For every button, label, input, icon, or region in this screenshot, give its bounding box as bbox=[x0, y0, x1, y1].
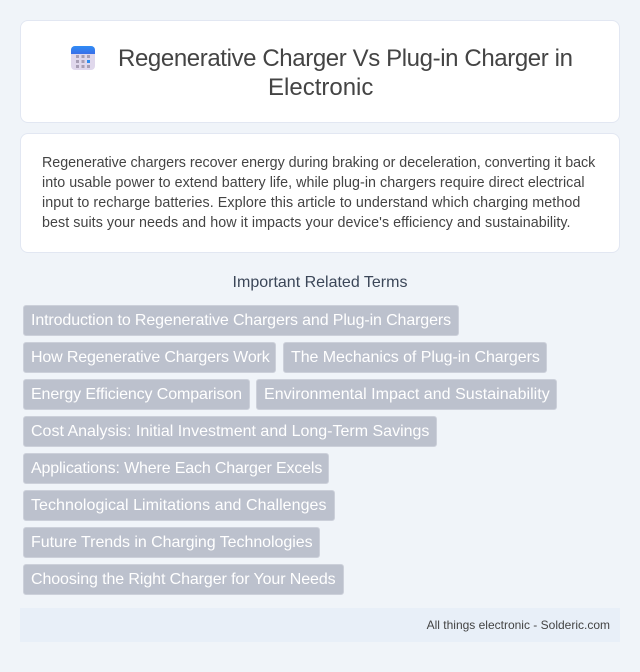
tag bbox=[23, 490, 335, 521]
tag: Energy Efficiency Comparison bbox=[31, 386, 242, 403]
tag bbox=[283, 342, 547, 373]
tag bbox=[23, 342, 276, 373]
icon: calendar bbox=[71, 46, 95, 70]
tag bbox=[23, 305, 459, 336]
tag: Technological Limitations and Challenges bbox=[31, 497, 327, 514]
tag bbox=[23, 379, 250, 410]
tag: Choosing the Right Charger for Your Needs bbox=[31, 571, 336, 588]
footer bar bbox=[20, 608, 620, 642]
tag: The Mechanics of Plug-in Chargers bbox=[291, 349, 540, 366]
tag bbox=[23, 416, 437, 447]
tag: Future Trends in Charging Technologies bbox=[31, 534, 313, 551]
title bbox=[118, 45, 573, 101]
tag bbox=[23, 564, 344, 595]
tag bbox=[23, 453, 329, 484]
title: Regenerative Charger Vs Plug-in Charger in bbox=[118, 45, 573, 72]
title: Electronic bbox=[268, 74, 373, 101]
intro paragraph: into usable power to extend battery life, while plug-in chargers require direct electrical bbox=[42, 175, 585, 191]
tag bbox=[256, 379, 557, 410]
tag: Environmental Impact and Sustainability bbox=[264, 386, 550, 403]
tag list bbox=[23, 305, 557, 595]
tag: Applications: Where Each Charger Excels bbox=[31, 460, 322, 477]
header card bbox=[20, 20, 620, 123]
tag: Introduction to Regenerative Chargers and Plug-in Chargers bbox=[31, 312, 451, 329]
intro paragraph: best suits your needs and how it impacts your device's efficiency and sustainability. bbox=[42, 215, 571, 231]
tag bbox=[23, 527, 320, 558]
intro paragraph: Regenerative chargers recover energy during braking or deceleration, converting it back bbox=[42, 155, 595, 171]
footer text: All things electronic - Solderic.com bbox=[427, 618, 610, 632]
tag: How Regenerative Chargers Work bbox=[31, 349, 270, 366]
intro text card bbox=[20, 133, 620, 253]
intro paragraph bbox=[42, 155, 596, 231]
heading: important related terms: Important Related Terms bbox=[233, 274, 407, 291]
tag: Cost Analysis: Initial Investment and Long-Term Savings bbox=[31, 423, 429, 440]
intro paragraph: input to recharge batteries. Explore this article to understand which charging method bbox=[42, 195, 580, 211]
